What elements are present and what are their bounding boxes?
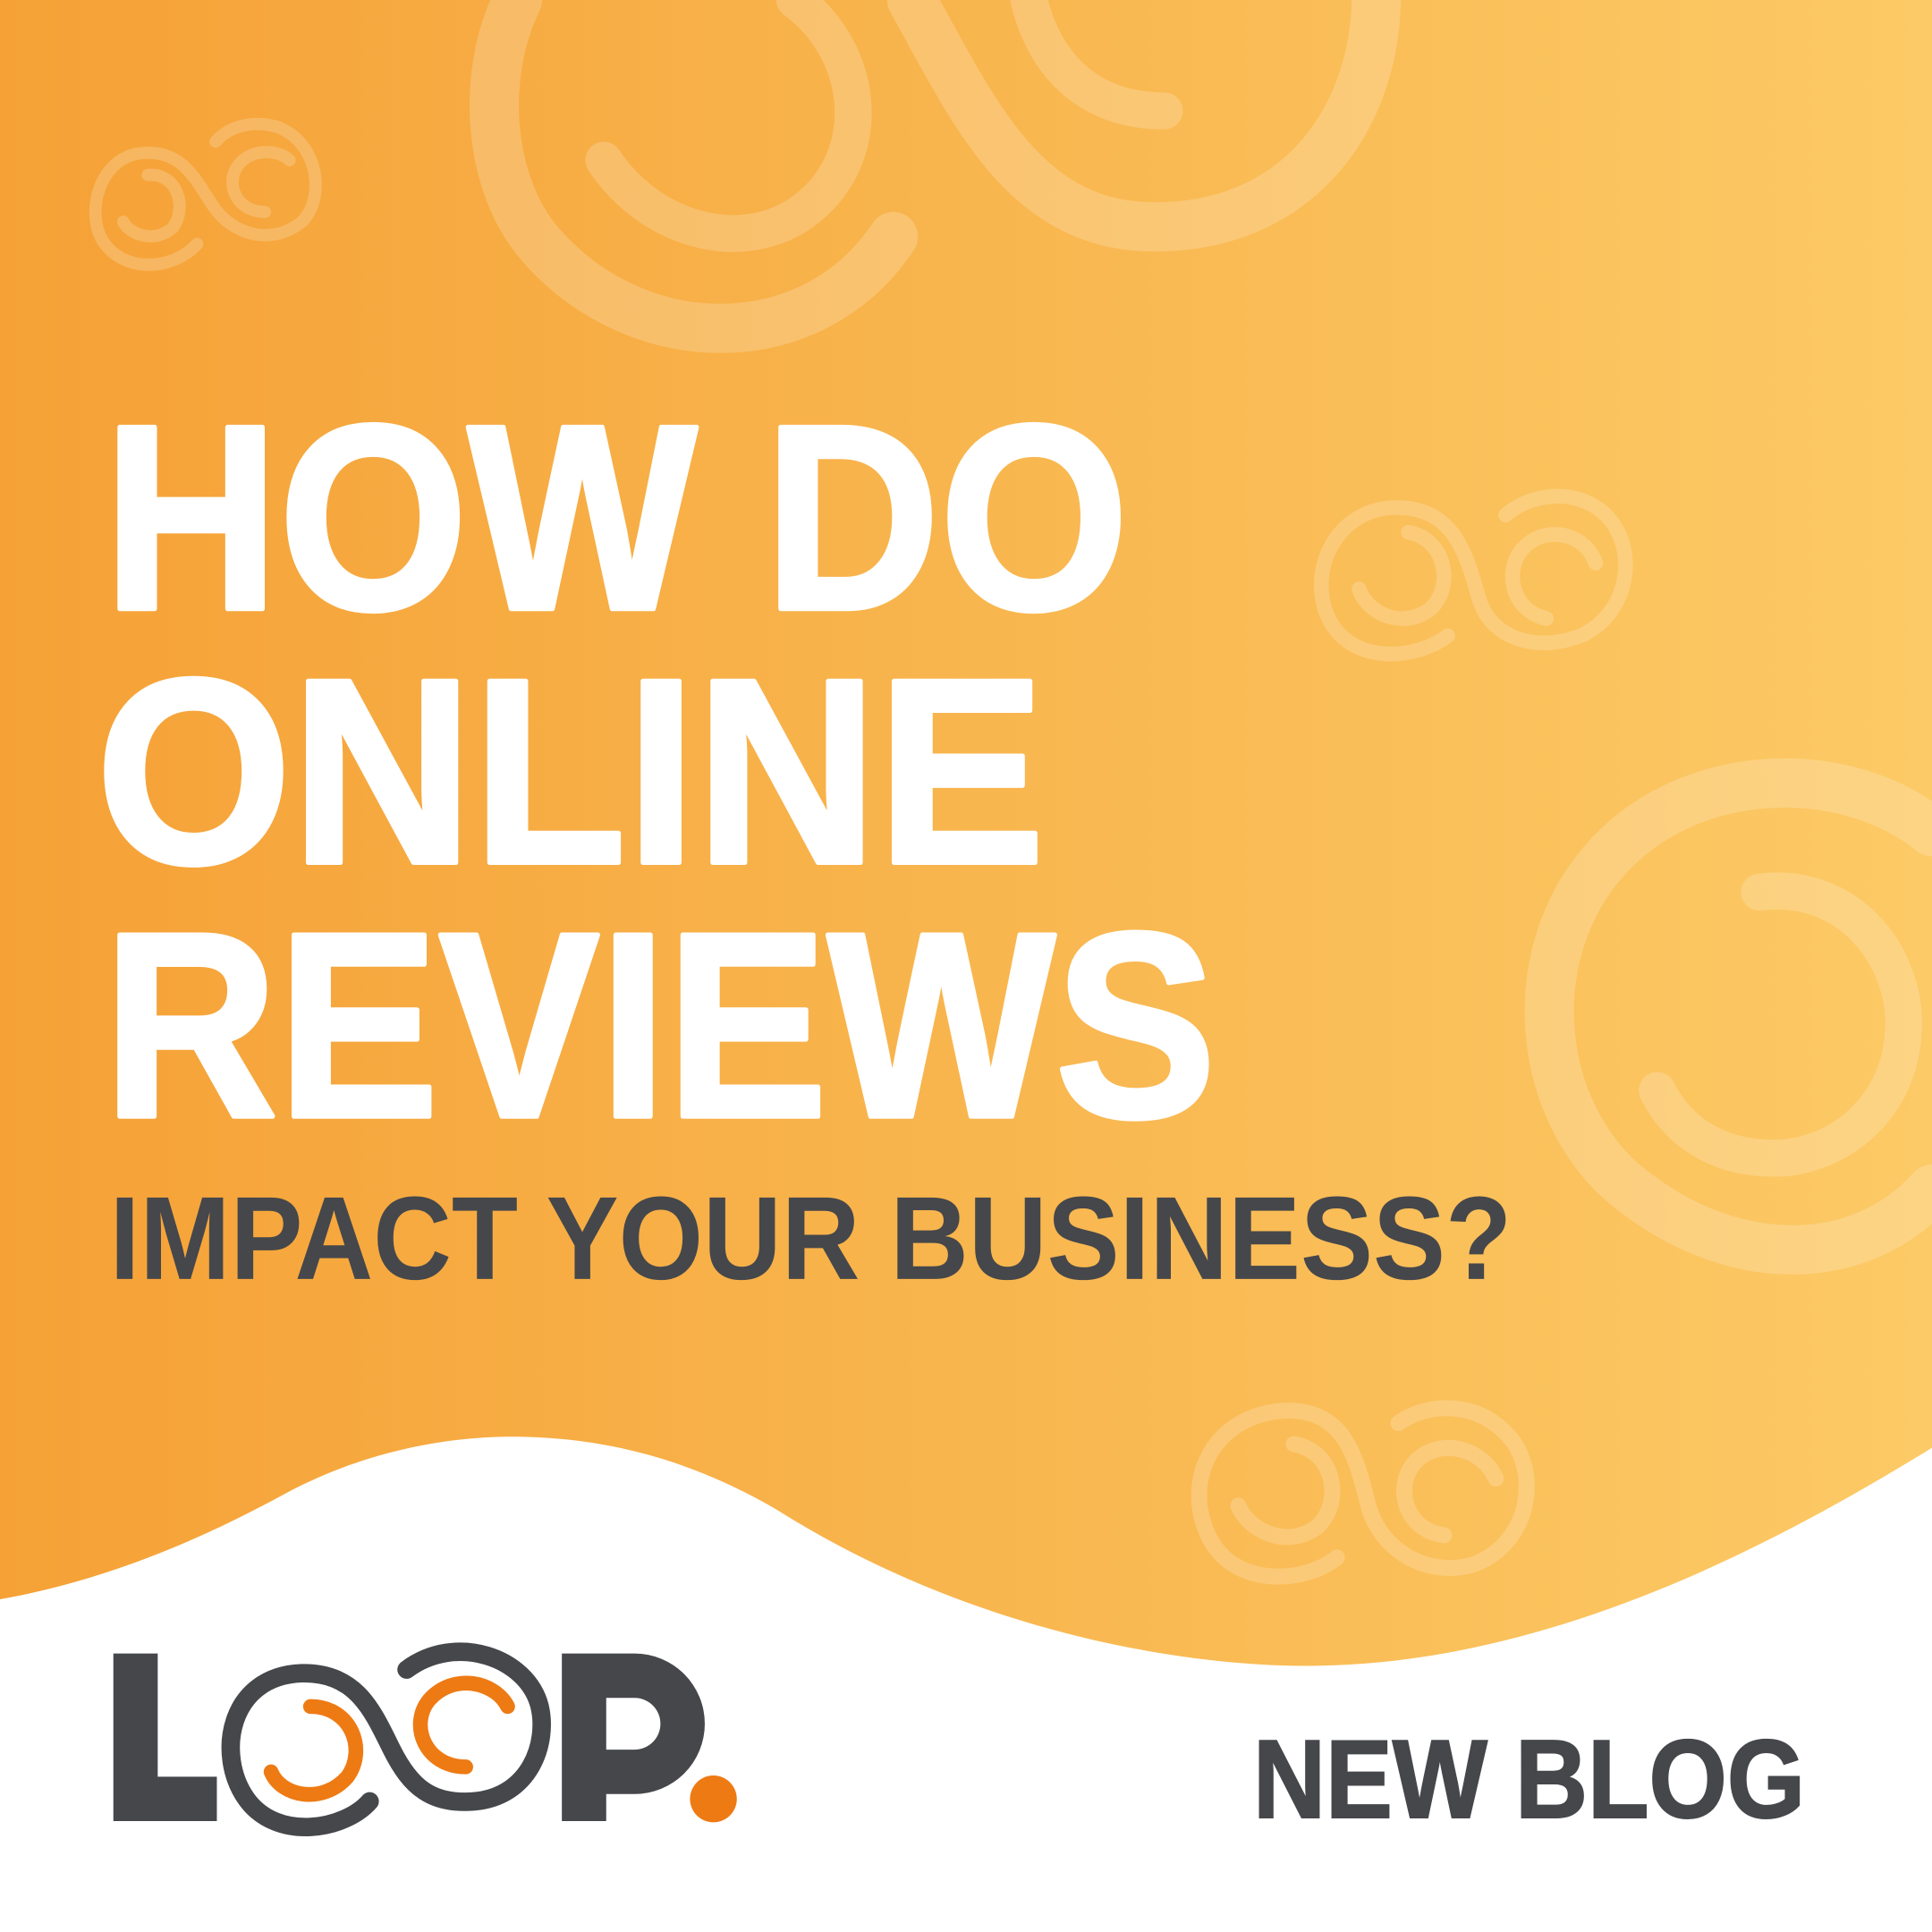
title: ONLINE <box>96 624 1045 919</box>
subtitle: IMPACT YOUR BUSINESS? <box>110 1173 1512 1305</box>
logo: LOOP. <box>114 1652 737 1827</box>
title: HOW DO <box>104 371 1129 665</box>
white wave footer <box>0 1436 1932 1932</box>
new blog label: NEW BLOG <box>1253 1718 1805 1842</box>
title <box>96 371 1216 1173</box>
decorative swirls <box>96 0 1932 1577</box>
title: REVIEWS <box>104 878 1216 1173</box>
